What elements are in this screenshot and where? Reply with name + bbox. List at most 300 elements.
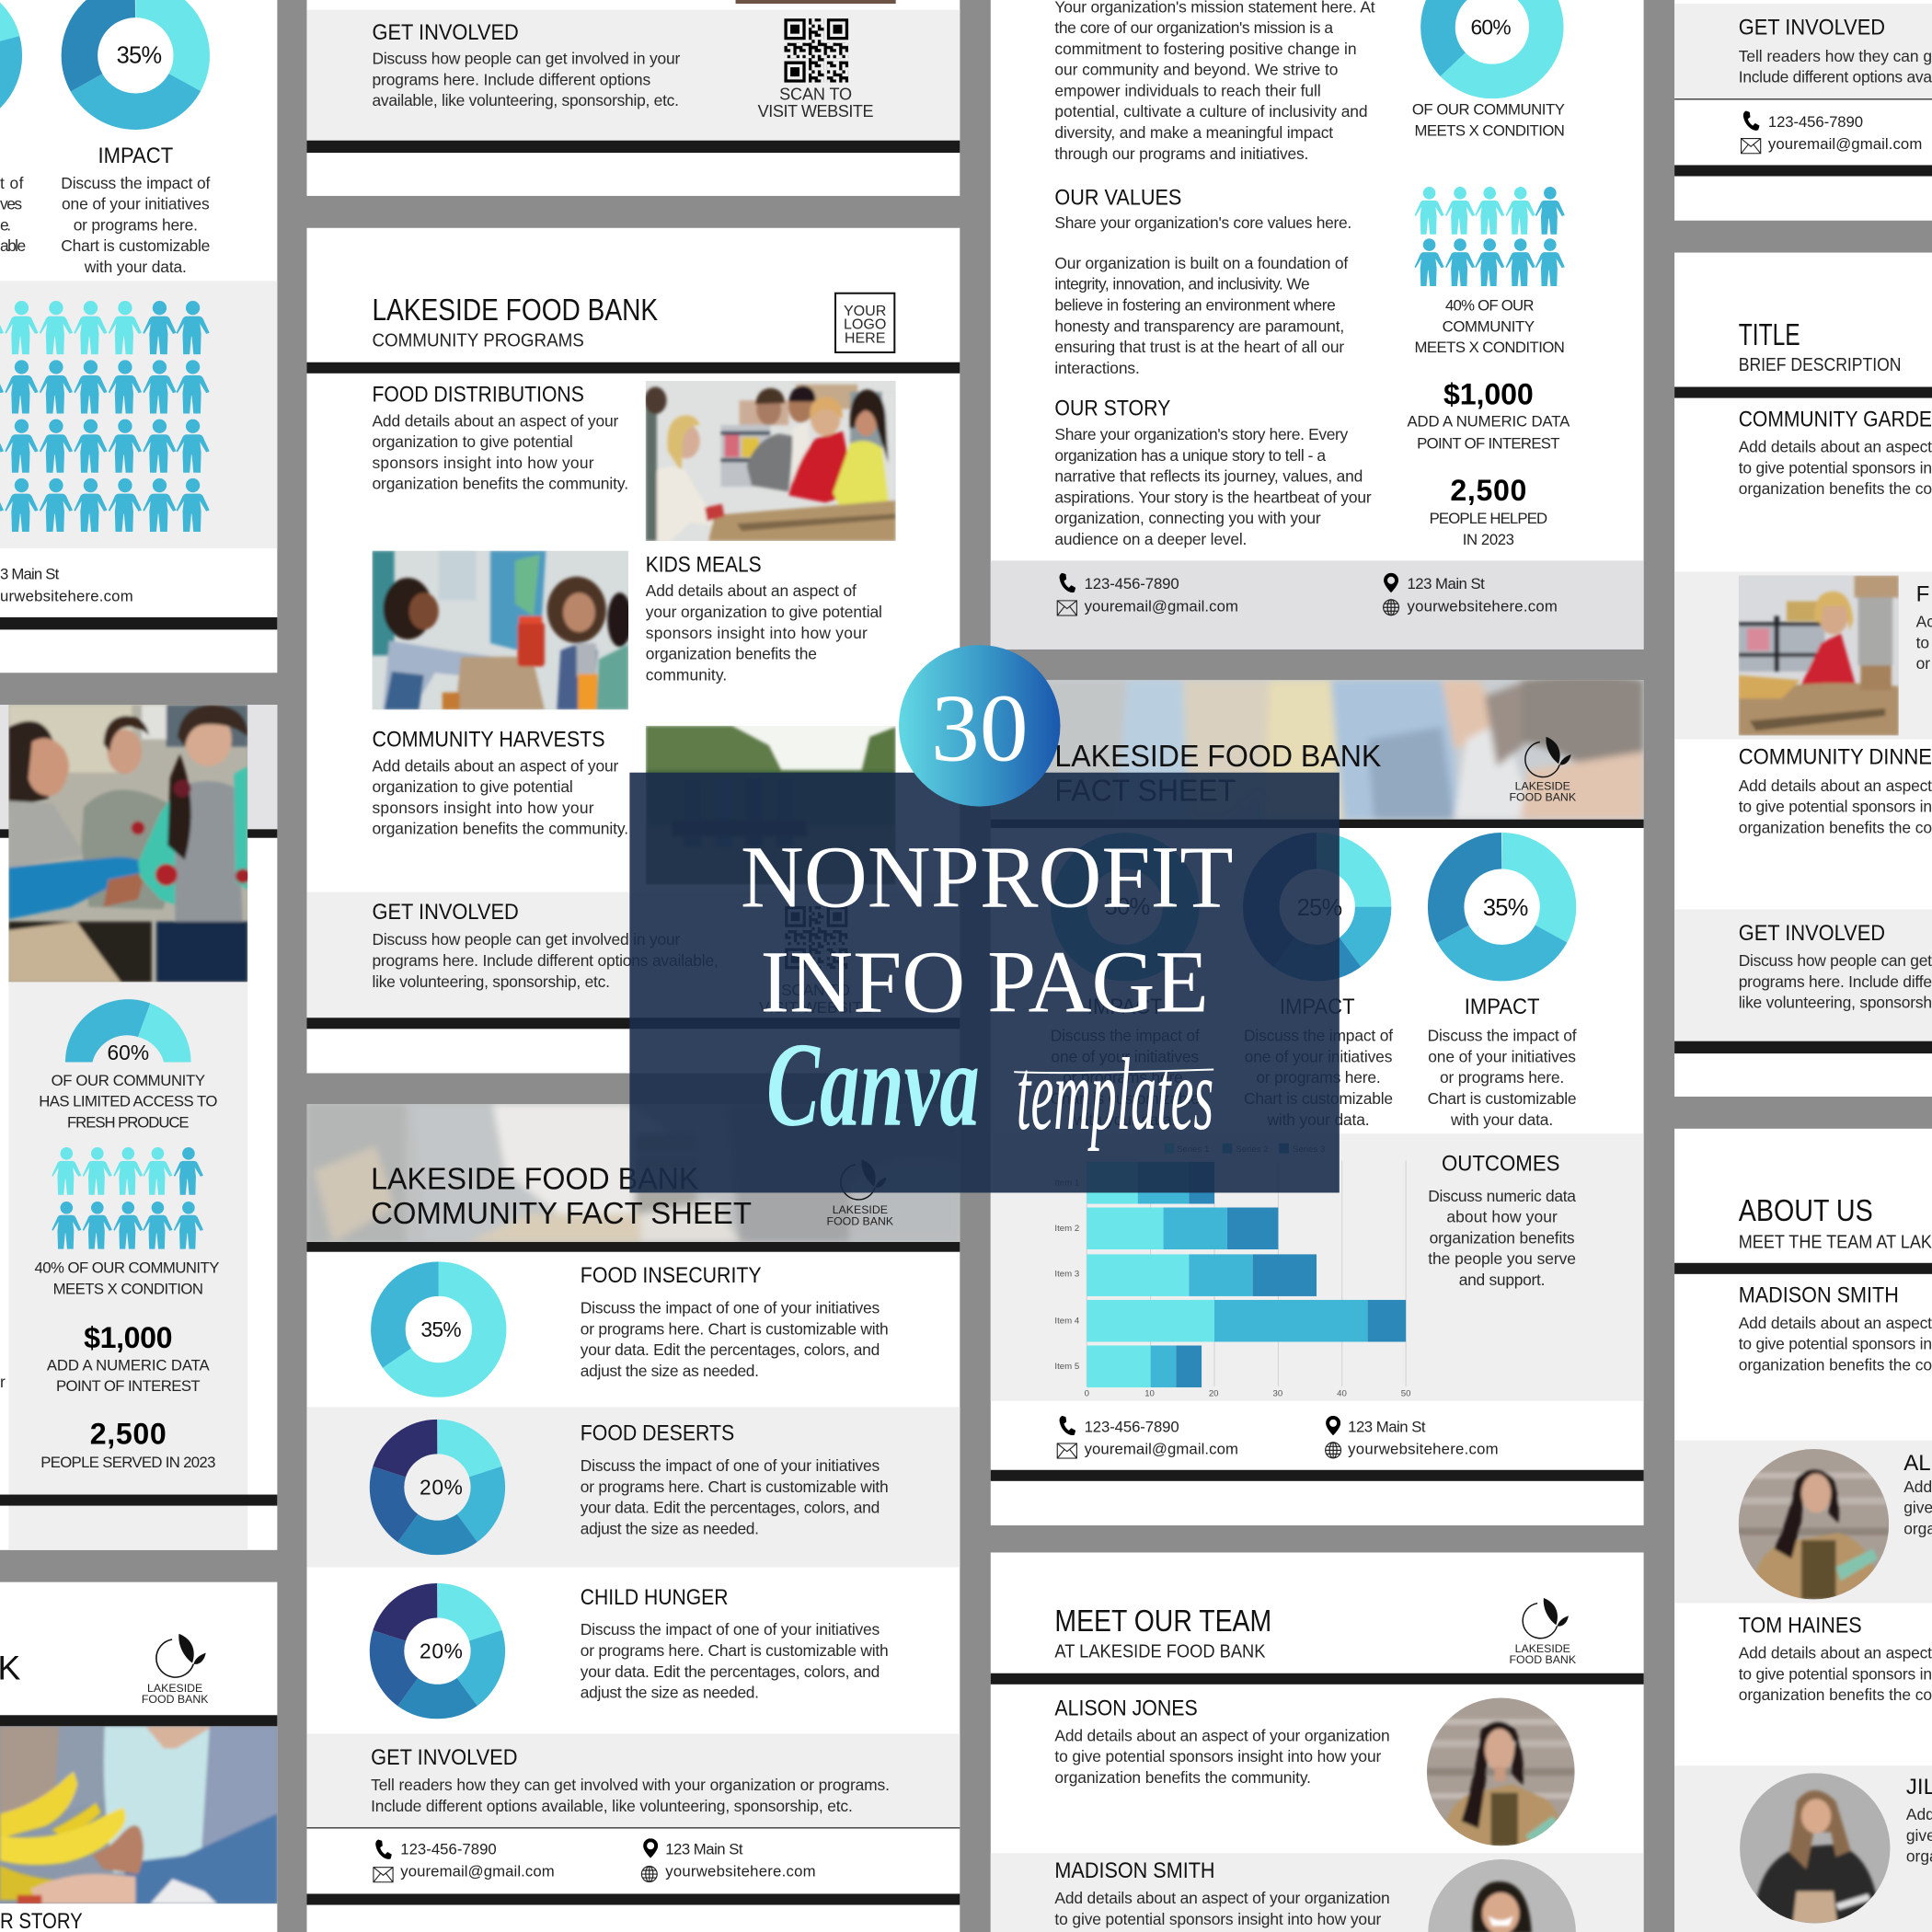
- text block: impact: with your data.: [84, 258, 187, 276]
- section: food insecurity: your data. Edit the percentages, colors, and: [581, 1340, 880, 1359]
- pictogram: ten people: [52, 1147, 203, 1249]
- logo: lakeside food bank: FOOD BANK: [1510, 791, 1577, 804]
- section: food distributions: sponsors insight into how your: [372, 454, 594, 472]
- section: child hunger: or programs here. Chart is customizable with: [581, 1641, 889, 1660]
- panel: community programs page: [306, 228, 960, 1074]
- contact details: [1057, 1416, 1499, 1458]
- title: community fact sheet: COMMUNITY FACT SHEET: [371, 1197, 752, 1231]
- bar: item 3: [1087, 1254, 1317, 1296]
- chart axis labels: Item 1: [1054, 1178, 1079, 1188]
- title: meet our team: MEET OUR TEAM: [1054, 1604, 1271, 1639]
- section: child hunger: your data. Edit the percentages, colors, and: [581, 1662, 880, 1681]
- panel: mission values and story page: [991, 0, 1644, 650]
- stat: 2500 people: PEOPLE SERVED IN 2023: [40, 1454, 215, 1471]
- text block: condition: 40% OF OUR COMMUNITY: [35, 1259, 219, 1276]
- text block: mission: the core of our organization's mission is a: [1054, 18, 1333, 37]
- section: madison smith: MADISON SMITH: [1739, 1283, 1899, 1308]
- text block: get involved: [372, 50, 680, 109]
- title: meet our team: [1054, 1604, 1271, 1662]
- section fragment: alison: [1903, 1451, 1932, 1537]
- column: impact 25 percent: [1244, 851, 1393, 1129]
- text block: outcomes: [1428, 1151, 1576, 1289]
- stat: 2500 people: [40, 1418, 215, 1471]
- chart legend: Series 1: [1177, 1144, 1209, 1155]
- logo placeholder: YOUR: [844, 303, 886, 319]
- logo: lakeside food bank: [827, 1159, 894, 1227]
- section: kids meals: your organization to give potential: [646, 603, 882, 621]
- column: impact 35 percent: with your data.: [1450, 1110, 1553, 1129]
- contact details: 123 Main St: [1407, 575, 1485, 592]
- column: impact 35 percent: Discuss the impact of: [1428, 1027, 1577, 1045]
- text block: outcomes: organization benefits: [1430, 1228, 1575, 1247]
- section: community garden: organization benefits the co: [1739, 479, 1932, 498]
- text block: our values: Our organization is built on a foundation of: [1054, 254, 1348, 272]
- chart axis labels: [1054, 1178, 1410, 1398]
- section: kids meals: KIDS MEALS: [646, 552, 762, 577]
- contact details: youremail@gmail.com: [1085, 1440, 1238, 1457]
- chart axis labels: 30: [1272, 1388, 1282, 1398]
- section: food deserts: adjust the size as needed.: [581, 1519, 759, 1537]
- title banner: navy overlay: [629, 773, 1340, 1192]
- section: food insecurity: or programs here. Chart is customizable with: [581, 1319, 889, 1338]
- panel: right column title page: [1674, 253, 1932, 1097]
- section: child hunger: [387, 1585, 889, 1702]
- stat: 2500 people: 2,500: [90, 1418, 167, 1451]
- section: community garden: Add details about an aspect: [1739, 438, 1932, 456]
- photo: header volunteers: [1045, 680, 1643, 819]
- section: get involved: GET INVOLVED: [372, 900, 519, 925]
- logo: lakeside food bank: [1510, 737, 1577, 804]
- panel: left column community stats page: [0, 705, 277, 1550]
- section: food distributions: FOOD DISTRIBUTIONS: [372, 383, 584, 408]
- caption: scan to visit website: [758, 85, 874, 121]
- contact details: 123-456-7890: [400, 1841, 497, 1858]
- text block: mission: through our programs and initiatives.: [1054, 144, 1308, 163]
- section fragment: food: [1916, 582, 1932, 673]
- text block: our values: [1054, 185, 1351, 377]
- logo: lakeside food bank: FOOD BANK: [1510, 1653, 1577, 1666]
- column: impact 25 percent: with your data.: [1266, 1110, 1370, 1129]
- contact details: urwebsitehere.com: [0, 588, 133, 605]
- contact details: youremail@gmail.com: [400, 1863, 555, 1880]
- section: madison smith: to give potential sponsors in: [1739, 1335, 1932, 1353]
- section: food distributions: organization benefits the community.: [372, 475, 628, 493]
- section: madison smith: MADISON SMITH: [1054, 1858, 1215, 1883]
- section: community garden: [1739, 407, 1932, 498]
- bar: item 4: [1087, 1300, 1406, 1341]
- stat: 2500 people: PEOPLE HELPED: [1430, 510, 1547, 527]
- caption: 40 percent: 40% OF OUR: [1445, 297, 1534, 314]
- stat: 1000 dollars: POINT OF INTEREST: [56, 1377, 201, 1395]
- logo placeholder: [835, 293, 894, 352]
- column: impact 25 percent: Discuss the impact of: [1244, 1027, 1393, 1045]
- section: get involved: SCAN TO: [781, 981, 850, 999]
- section: food deserts: Discuss the impact of one of your initiatives: [581, 1456, 880, 1475]
- logo placeholder: HERE: [845, 329, 886, 346]
- gauge label: 60%: [108, 1041, 149, 1064]
- section: community dinners: Add details about an aspect: [1739, 776, 1932, 795]
- section: madison smith: Add details about an aspect: [1739, 1314, 1932, 1332]
- donut chart: 35 percent: [388, 1279, 489, 1380]
- text block: outcomes: and support.: [1459, 1271, 1545, 1289]
- donut chart: partial left: [0, 0, 5, 111]
- text block: mission: [1054, 0, 1375, 163]
- text block: get involved: programs here. Include different options: [372, 70, 650, 88]
- contact details: 123 Main St: [665, 1841, 743, 1858]
- section: get involved: Tell readers how they can get involved with your organization or programs.: [371, 1776, 890, 1794]
- text block: impact: ves: [0, 195, 22, 213]
- title: about us: ABOUT US: [1739, 1194, 1873, 1228]
- photo: volunteer handing apples to children: [8, 705, 250, 982]
- text block: impact: Discuss the impact of: [61, 174, 211, 192]
- column: impact 35 percent: IMPACT: [1465, 995, 1540, 1019]
- title: fact sheet: LAKESIDE FOOD BANK: [1054, 740, 1381, 774]
- logo: lakeside food bank: FOOD BANK: [827, 1214, 894, 1227]
- section: food distributions: [372, 383, 628, 493]
- panel: left column impact page: [0, 0, 277, 673]
- column: impact 25 percent: or programs here.: [1256, 1068, 1381, 1087]
- title: fact sheet: FACT SHEET: [1054, 775, 1236, 809]
- donut chart: 20 percent: [387, 1601, 488, 1702]
- text block: our story: aspirations. Your story is the heartbeat of your: [1054, 488, 1372, 506]
- contact details: 123 Main St: [1348, 1418, 1426, 1435]
- section: get involved: Discuss how people can get: [1739, 951, 1932, 970]
- badge: 30: 30: [931, 674, 1029, 781]
- section: alison jones: Add details about an aspect of your organization: [1054, 1726, 1390, 1744]
- section: kids meals: Add details about an aspect of: [646, 581, 857, 600]
- column: impact 50 percent: IMPACT: [1087, 995, 1163, 1019]
- section: community dinners: to give potential sponsors in: [1739, 798, 1932, 816]
- column: impact 35 percent: or programs here.: [1440, 1068, 1564, 1087]
- logo: lakeside food bank: LAKESIDE: [1515, 779, 1570, 792]
- pictogram: ten people: [1415, 187, 1565, 286]
- section: get involved: [1739, 921, 1932, 1012]
- title: fact sheet: [1054, 740, 1381, 809]
- logo: lakeside food bank: LAKESIDE: [833, 1203, 888, 1216]
- column: impact 50 percent: with your data.: [1073, 1110, 1176, 1129]
- logo: lakeside food bank: [142, 1634, 209, 1706]
- title: lakeside food bank: COMMUNITY PROGRAMS: [372, 330, 584, 351]
- column: impact 25 percent: Chart is customizable: [1244, 1089, 1393, 1108]
- caption: 40 percent: [1415, 296, 1565, 356]
- section: food insecurity: adjust the size as needed.: [581, 1362, 759, 1380]
- text block: mission: commitment to fostering positive change in: [1054, 40, 1357, 58]
- section: food insecurity: [388, 1263, 889, 1380]
- contact details: youremail@gmail.com: [1085, 597, 1238, 615]
- text block: impact: Chart is customizable: [61, 236, 210, 255]
- contact details: yourwebsitehere.com: [1407, 597, 1558, 615]
- column: impact 25 percent: 25%: [1297, 895, 1342, 921]
- contact details: [1742, 111, 1922, 154]
- text block: our story: narrative that reflects its journey, values, and: [1054, 467, 1363, 486]
- stat: 2500 people: IN 2023: [1463, 531, 1514, 548]
- icon: qr code: [784, 18, 848, 83]
- text block: impact: t of: [0, 174, 24, 192]
- title: info page: INFO PAGE: [760, 933, 1209, 1031]
- column: impact 50 percent: 50%: [1105, 894, 1150, 920]
- text block: our values: ensuring that trust is at the heart of all our: [1054, 338, 1344, 356]
- section: tom haines: [1739, 1614, 1932, 1704]
- text block: our values: interactions.: [1054, 359, 1140, 377]
- text block: community access: [39, 1072, 217, 1131]
- section fragment: food: or: [1916, 654, 1930, 673]
- text block: our story: organization has a unique story to tell - a: [1054, 446, 1326, 465]
- column: impact 50 percent: or programs here.: [1063, 1068, 1187, 1087]
- caption: community: [1412, 101, 1565, 139]
- section: alison jones: ALISON JONES: [1054, 1696, 1198, 1720]
- section: kids meals: sponsors insight into how your: [646, 624, 868, 642]
- section fragment: food: F: [1916, 582, 1929, 607]
- text block: our story: organization, connecting you with your: [1054, 509, 1321, 527]
- text block: outcomes: about how your: [1446, 1208, 1558, 1226]
- section: child hunger: adjust the size as needed.: [581, 1684, 759, 1702]
- section: community garden: to give potential sponsors in: [1739, 458, 1932, 477]
- gauge chart: 60 percent: [65, 999, 191, 1062]
- bar: item 5: [1087, 1345, 1202, 1387]
- section fragment: food: to: [1916, 633, 1929, 651]
- stat: 1000 dollars: ADD A NUMERIC DATA: [47, 1356, 211, 1374]
- section: food insecurity: 35%: [420, 1317, 462, 1341]
- column: impact 50 percent: one of your initiatives: [1051, 1047, 1199, 1065]
- text block: get involved: Tell readers how they can g: [1739, 47, 1932, 65]
- text block: impact: able: [0, 236, 26, 255]
- text block: get involved: [1739, 15, 1932, 86]
- section fragment: jill: [1906, 1775, 1932, 1866]
- column: impact 50 percent: [1051, 851, 1200, 1129]
- section: alison jones: to give potential sponsors insight into how your: [1054, 1747, 1382, 1765]
- text block: mission: our community and beyond. We strive to: [1054, 61, 1338, 79]
- panel: right column about us page: [1674, 1129, 1932, 1932]
- stat: 1000 dollars: POINT OF INTEREST: [1417, 434, 1560, 452]
- photo: volunteers harvesting: [646, 726, 896, 885]
- column: impact 35 percent: 35%: [1483, 895, 1528, 921]
- section: food insecurity: Discuss the impact of one of your initiatives: [581, 1299, 880, 1317]
- section: get involved: programs here. Include diffe: [1739, 972, 1932, 991]
- panel: meet our team page: [991, 1553, 1644, 1932]
- bar chart: stacked series: [1054, 1144, 1410, 1398]
- panel: fact sheet page: [991, 674, 1644, 1525]
- text block: get involved: Include different options ava: [1739, 68, 1932, 86]
- chart axis labels: Item 5: [1054, 1362, 1079, 1372]
- text block: our values: OUR VALUES: [1054, 185, 1181, 210]
- contact details: 123-456-7890: [1768, 113, 1863, 131]
- chart axis labels: 50: [1401, 1388, 1410, 1398]
- column: impact 35 percent: [1428, 851, 1577, 1129]
- section: kids meals: organization benefits the: [646, 645, 817, 663]
- pictogram: people grid: [0, 281, 277, 548]
- donut chart: 20 percent: [387, 1437, 488, 1537]
- text block: condition: [35, 1259, 219, 1297]
- section: alison jones: organization benefits the community.: [1054, 1768, 1311, 1787]
- text block: get involved: GET INVOLVED: [1739, 15, 1885, 40]
- text block: outcomes: the people you serve: [1428, 1249, 1576, 1268]
- section: food insecurity: FOOD INSECURITY: [581, 1263, 762, 1288]
- caption: 40 percent: MEETS X CONDITION: [1415, 339, 1565, 356]
- section: food deserts: FOOD DESERTS: [581, 1421, 734, 1446]
- section: madison smith: [1739, 1283, 1932, 1374]
- script: templates: [1014, 1038, 1213, 1152]
- text block: community access: OF OUR COMMUNITY: [52, 1072, 205, 1089]
- portrait: alison jones: [1427, 1698, 1575, 1846]
- chart axis labels: 40: [1337, 1388, 1347, 1398]
- text block: impact: e.: [0, 215, 11, 234]
- heading: impact: IMPACT: [98, 144, 173, 168]
- stat: 1000 dollars: [1407, 377, 1570, 453]
- text block: community access: HAS LIMITED ACCESS TO: [39, 1093, 217, 1110]
- title: community fact sheet: [371, 1162, 752, 1231]
- column: impact 25 percent: IMPACT: [1280, 995, 1355, 1019]
- section: get involved: like volunteering, sponsorship, etc.: [372, 972, 610, 991]
- text block: impact: [0, 174, 211, 276]
- chart axis labels: Item 2: [1054, 1224, 1079, 1234]
- section: community dinners: [1739, 744, 1932, 836]
- photo: volunteers packing boxes: [644, 381, 896, 541]
- text block: our values: honesty and transparency are paramount,: [1054, 316, 1344, 335]
- text block: get involved: Discuss how people can get involved in your: [372, 50, 680, 68]
- section: food deserts: [306, 1407, 960, 1568]
- chart axis labels: 10: [1144, 1388, 1155, 1398]
- caption: community: MEETS X CONDITION: [1415, 121, 1565, 139]
- bar: item 1: [1087, 1162, 1214, 1203]
- text block: our values: integrity, innovation, and inclusivity. We: [1054, 275, 1310, 293]
- logo: lakeside food bank: LAKESIDE: [147, 1682, 202, 1695]
- logo placeholder: LOGO: [844, 316, 886, 333]
- section: madison smith: Add details about an aspect of your organization: [1054, 1889, 1390, 1907]
- title: [1739, 318, 1902, 375]
- contact details: yourwebsitehere.com: [665, 1863, 816, 1880]
- section fragment: alison: Add: [1903, 1478, 1932, 1496]
- section: get involved: Include different options available, like volunteering, sponsorship, etc.: [371, 1797, 853, 1815]
- column: impact 25 percent: one of your initiatives: [1245, 1047, 1393, 1065]
- section: kids meals: [646, 552, 882, 684]
- chart axis labels: Item 4: [1054, 1316, 1080, 1326]
- column: impact 50 percent: Chart is customizable: [1051, 1089, 1200, 1108]
- title: TITLE: [1739, 318, 1800, 352]
- section: madison smith: [1054, 1858, 1390, 1928]
- column: impact 35 percent: one of your initiatives: [1428, 1047, 1576, 1065]
- text block: impact: or programs here.: [74, 215, 198, 234]
- stat: 1000 dollars: r: [0, 1373, 6, 1391]
- photo: woman in food pantry: [1739, 575, 1899, 736]
- title: BRIEF DESCRIPTION: [1739, 355, 1902, 375]
- title: lakeside food bank: LAKESIDE FOOD BANK: [372, 293, 658, 328]
- text block: our story: [1054, 396, 1372, 548]
- stat: 1000 dollars: [0, 1321, 211, 1395]
- section: alison jones: [1054, 1696, 1390, 1787]
- donut label: 60%: [1470, 15, 1512, 40]
- portrait: jill: [1740, 1773, 1890, 1924]
- photo: kids with food bags: [372, 551, 632, 709]
- section: get involved: GET INVOLVED: [371, 1745, 517, 1770]
- chart axis labels: Item 3: [1054, 1269, 1079, 1279]
- panel: community fact sheet page: [306, 1104, 960, 1932]
- title banner: navy overlay: templates: [1017, 1038, 1213, 1152]
- section: food deserts: or programs here. Chart is customizable with: [581, 1478, 889, 1496]
- chart legend: [1165, 1144, 1325, 1155]
- text block: mission: diversity, and make a meaningful impact: [1054, 123, 1333, 142]
- stat: 2500 people: 2,500: [1450, 474, 1526, 507]
- portrait: alison: [1739, 1449, 1889, 1599]
- text block: outcomes: Discuss numeric data: [1428, 1187, 1576, 1205]
- text block: impact: one of your initiatives: [62, 195, 210, 213]
- column: impact 50 percent: Discuss the impact of: [1051, 1027, 1200, 1045]
- photo: hands holding bananas: [0, 1726, 277, 1903]
- section: get involved: GET INVOLVED: [1739, 921, 1885, 946]
- text block: our values: Share your organization's core values here.: [1054, 213, 1351, 232]
- text block: outcomes: OUTCOMES: [1442, 1151, 1560, 1176]
- section: tom haines: Add details about an aspect: [1739, 1644, 1932, 1662]
- section: child hunger: CHILD HUNGER: [581, 1585, 729, 1610]
- text block: our story: Share your organization's story here. Every: [1054, 425, 1348, 443]
- stat: 2500 people: [1430, 474, 1547, 548]
- section: get involved: programs here. Include different options available,: [372, 951, 719, 970]
- panel: right column get involved: [1674, 0, 1932, 221]
- logo: lakeside food bank: LAKESIDE: [1515, 1642, 1570, 1655]
- section: community harvests: COMMUNITY HARVESTS: [372, 728, 605, 753]
- contact details: 3 Main St: [0, 565, 60, 582]
- section: food distributions: Add details about an aspect of your: [372, 411, 619, 430]
- caption: scan to visit website: SCAN TO: [779, 85, 852, 103]
- section: tom haines: TOM HAINES: [1739, 1614, 1862, 1639]
- text block: community access: FRESH PRODUCE: [67, 1113, 190, 1131]
- section: child hunger: Discuss the impact of one of your initiatives: [581, 1620, 880, 1639]
- section: tom haines: organization benefits the co: [1739, 1685, 1932, 1704]
- section: food deserts: your data. Edit the percentages, colors, and: [581, 1499, 880, 1517]
- section: community harvests: [372, 728, 628, 838]
- title: nonprofit: NONPROFIT: [741, 828, 1234, 926]
- photo: header can donation: [306, 1104, 960, 1242]
- donut chart: 60 percent: [1438, 0, 1547, 81]
- logo: lakeside food bank: [1510, 1598, 1577, 1666]
- section: get involved: [306, 1733, 960, 1829]
- stat: 1000 dollars: $1,000: [1443, 377, 1534, 410]
- section: food distributions: organization to give potential: [372, 432, 573, 451]
- section: get involved: Discuss how people can get involved in your: [372, 930, 680, 949]
- section: get involved: like volunteering, sponsorsh: [1739, 994, 1932, 1012]
- text block: our story: audience on a deeper level.: [1054, 530, 1247, 548]
- chart legend: Series 2: [1236, 1144, 1269, 1155]
- bar: item 2: [1087, 1207, 1278, 1249]
- caption: scan to visit website: VISIT WEBSITE: [758, 102, 874, 121]
- stat: 1000 dollars: ADD A NUMERIC DATA: [1407, 412, 1570, 430]
- section: tom haines: to give potential sponsors in: [1739, 1664, 1932, 1683]
- contact details: yourwebsitehere.com: [1348, 1440, 1499, 1457]
- title: about us: [1739, 1194, 1932, 1253]
- chart axis labels: 0: [1085, 1388, 1089, 1398]
- chart legend: Series 3: [1293, 1144, 1325, 1155]
- text block: our values: believe in fostering an environment where: [1054, 295, 1336, 314]
- contact details: youremail@gmail.com: [1768, 135, 1922, 153]
- column: impact 35 percent: Chart is customizable: [1428, 1089, 1577, 1108]
- section: community dinners: organization benefits the co: [1739, 818, 1932, 836]
- section: kids meals: community.: [646, 665, 727, 684]
- text block: get involved: available, like volunteering, sponsorship, etc.: [372, 91, 679, 109]
- contact details: 123-456-7890: [1085, 1418, 1179, 1435]
- panel: left column our story page: [0, 1582, 277, 1932]
- text block: mission: potential, cultivate a culture of inclusivity and: [1054, 102, 1368, 121]
- section: community harvests: organization benefits the community.: [372, 820, 628, 838]
- logo: lakeside food bank: FOOD BANK: [142, 1693, 209, 1706]
- text block: condition: MEETS X CONDITION: [53, 1280, 203, 1297]
- section: madison smith: to give potential sponsors insight into how your: [1054, 1910, 1382, 1928]
- heading: get involved: GET INVOLVED: [372, 20, 519, 45]
- donut chart: 35 percent: [79, 0, 191, 111]
- stat: 1000 dollars: $1,000: [84, 1321, 173, 1354]
- badge: 30: [899, 645, 1060, 807]
- section: child hunger: 20%: [420, 1639, 463, 1663]
- section: madison smith: organization benefits the co: [1739, 1355, 1932, 1374]
- section: get involved: [306, 892, 960, 1018]
